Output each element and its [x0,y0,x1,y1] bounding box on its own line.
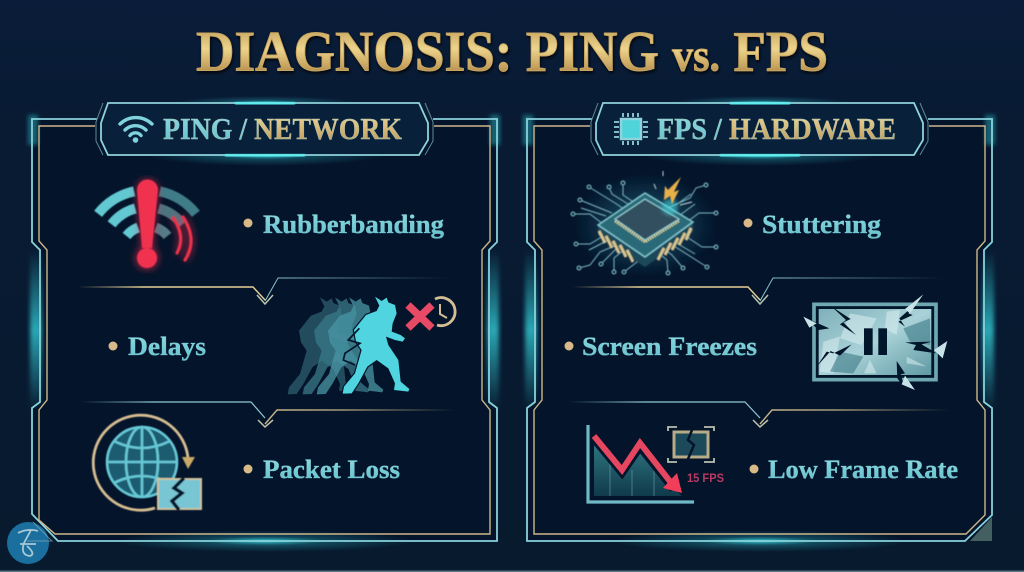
heading: ping / network: PING / NETWORK [163,111,402,146]
icon: wifi warning [98,180,196,269]
icon: falling frame rate chart [588,425,724,502]
icon: wifi [120,118,152,143]
icon: damaged cpu chip [571,171,718,277]
header tab [591,102,928,156]
icon: red x and clock [408,298,455,328]
label: 15 fps: 15 FPS [687,473,724,485]
bullet: delays: Delays [128,332,206,361]
icon: globe packet loss [93,415,201,510]
divider arrow 2 [80,402,456,427]
outer frame [32,119,497,541]
inner gold frame [534,126,985,534]
header tab [96,102,433,156]
panel fill [32,119,497,541]
side glows [523,96,995,552]
bullet: rubberbanding: Rubberbanding [263,210,444,239]
side glows [28,96,500,552]
icon: broken frame [668,427,714,462]
panel: ping / network [28,96,500,552]
bullet: packet loss: Packet Loss [263,455,400,484]
divider arrow 2 [568,402,950,427]
outer frame [527,119,992,541]
icon: small chip [614,113,648,145]
inner gold frame [39,126,490,534]
icon: cracked frozen screen [803,294,947,390]
bullet: stuttering: Stuttering [762,210,881,239]
panel: fps / hardware [523,96,995,552]
title: DIAGNOSIS: PING vs. FPS [196,20,828,84]
bullet: screen freezes: Screen Freezes [582,332,757,361]
icon: running figure with afterimages [288,297,409,394]
corner ornament [970,517,992,541]
heading: fps / hardware: FPS / HARDWARE [657,111,896,146]
panel fill [527,119,992,541]
divider arrow 1 [78,278,450,304]
bullet: low frame rate: Low Frame Rate [768,455,958,484]
watermark logo [7,522,52,564]
divider arrow 1 [573,278,945,304]
